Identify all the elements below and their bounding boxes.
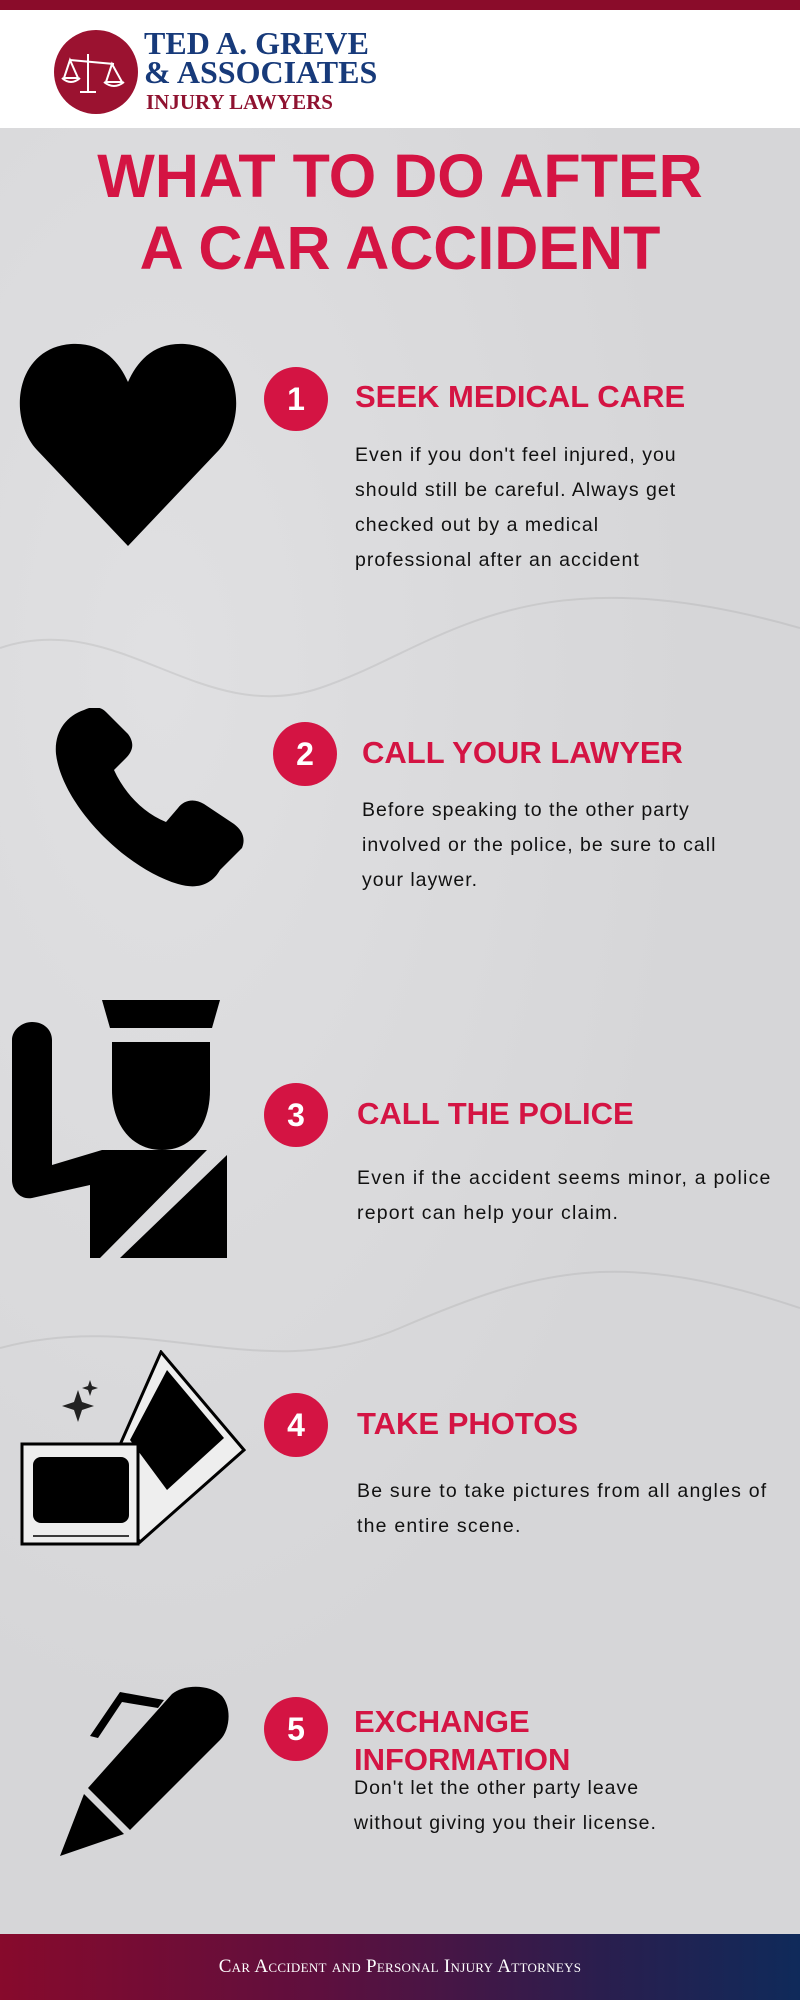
number 5 (264, 1697, 328, 1761)
number 3 (264, 1083, 328, 1147)
step 2 (273, 722, 716, 891)
text (354, 1777, 657, 1834)
heading: EXCHANGE (354, 1704, 530, 1739)
heading: CALL THE POLICE (357, 1096, 634, 1131)
icon: scales logo (54, 30, 138, 114)
logo text: & ASSOCIATES (144, 54, 377, 90)
icon: photos (20, 1350, 246, 1546)
number 2 (273, 722, 337, 786)
number 4 (264, 1393, 328, 1457)
footer: Car Accident and Personal Injury Attorneys (219, 1956, 581, 1977)
header logo (0, 10, 800, 128)
text: report can help your claim. (357, 1202, 619, 1224)
text: the entire scene. (357, 1515, 522, 1537)
icon: police officer (12, 1000, 227, 1258)
heading: CALL YOUR LAWYER (362, 735, 683, 770)
text: Even if the accident seems minor, a police (357, 1167, 772, 1189)
number 1 (264, 367, 328, 431)
text: Even if you don't feel injured, you (355, 444, 677, 466)
title (97, 142, 703, 282)
text (362, 799, 716, 891)
title: WHAT TO DO AFTER (97, 142, 703, 210)
step 4 (264, 1393, 767, 1537)
text: Be sure to take pictures from all angles of (357, 1480, 767, 1502)
header logo: INJURY LAWYERS (146, 90, 333, 114)
title: A CAR ACCIDENT (140, 214, 660, 282)
heading: INFORMATION (354, 1742, 570, 1777)
number 3: 3 (287, 1097, 305, 1133)
number 2: 2 (296, 736, 314, 772)
text (357, 1167, 772, 1224)
number 4: 4 (287, 1407, 305, 1443)
icon: pen (60, 1686, 229, 1856)
logo text (144, 25, 377, 90)
text: without giving you their license. (354, 1812, 657, 1834)
text: should still be careful. Always get (355, 479, 676, 501)
text: Before speaking to the other party (362, 799, 690, 821)
text: professional after an accident (355, 549, 640, 571)
text: your laywer. (362, 869, 478, 891)
text (355, 444, 677, 571)
heading: SEEK MEDICAL CARE (355, 379, 685, 414)
step 1 (264, 367, 685, 571)
heading: TAKE PHOTOS (357, 1406, 578, 1441)
number 1: 1 (287, 381, 305, 417)
text: checked out by a medical (355, 514, 599, 536)
logo text: TED A. GREVE (144, 25, 369, 61)
step 3 (264, 1083, 772, 1224)
top bar (0, 0, 800, 10)
step 5 (264, 1697, 657, 1834)
footer (0, 1934, 800, 2000)
text: Don't let the other party leave (354, 1777, 639, 1799)
text (357, 1480, 767, 1537)
icon: phone (56, 708, 244, 886)
number 5: 5 (287, 1711, 305, 1747)
text: involved or the police, be sure to call (362, 834, 716, 856)
heading (354, 1704, 570, 1777)
icon: heart (20, 344, 236, 546)
